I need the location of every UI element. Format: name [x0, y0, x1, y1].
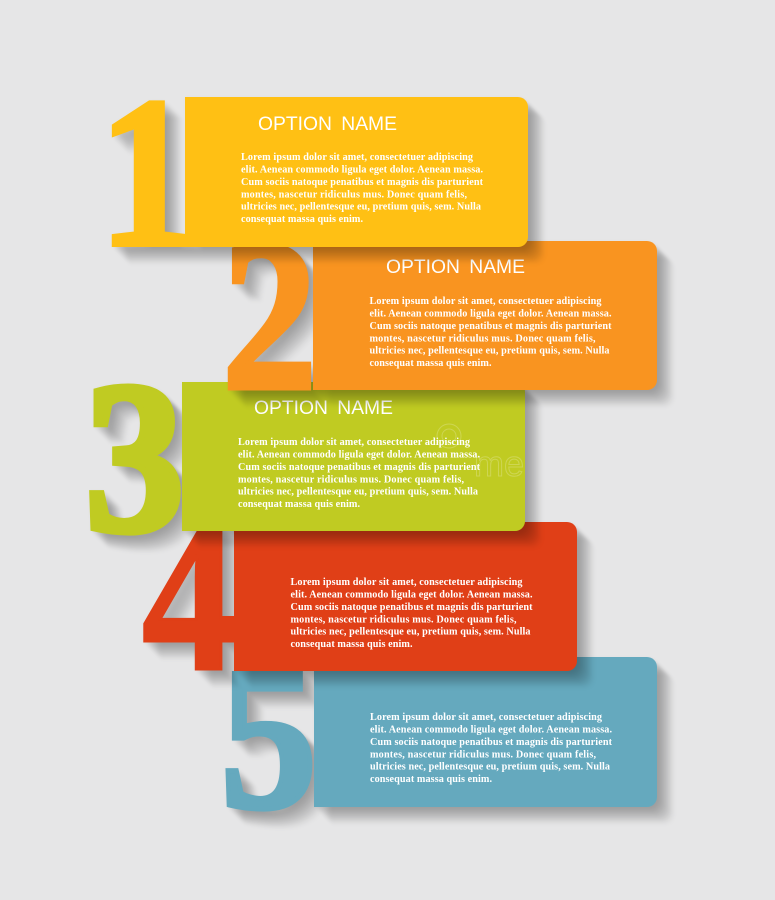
body text 4 [290, 577, 533, 650]
body text 2 [370, 296, 612, 369]
body text 3: ultricies nec, pellentesque eu, pretium quis, sem. Nulla [238, 487, 478, 498]
number 3 and green panel [85, 337, 525, 577]
body text 4: ultricies nec, pellentesque eu, pretium quis, sem. Nulla [290, 627, 530, 638]
number 5 and blue panel [225, 657, 673, 828]
faint watermark [437, 424, 524, 484]
body text 3: consequat massa quis enim. [238, 499, 360, 510]
title 2: OPTION NAME [386, 257, 525, 278]
number 4 and red panel [142, 478, 577, 717]
body text 5 [370, 712, 613, 785]
body text 4: Cum sociis natoque penatibus et magnis dis parturient [290, 602, 533, 613]
number 5 and blue panel: 5 [220, 616, 317, 854]
title 1: OPTION NAME [258, 114, 397, 135]
number 2 and orange panel [222, 197, 657, 436]
body text 5: elit. Aenean commodo ligula eget dolor. Aenean massa. [370, 724, 612, 736]
body text 3 [238, 437, 481, 510]
body text 3: elit. Aenean commodo ligula eget dolor. Aenean massa. [238, 450, 480, 460]
body text 3: Cum sociis natoque penatibus et magnis dis parturient [238, 462, 481, 473]
body text 1: ultricies nec, pellentesque eu, pretium quis, sem. Nulla [241, 202, 481, 213]
body text 4: consequat massa quis enim. [290, 639, 413, 650]
number 1 and yellow panel: 1 [98, 54, 195, 292]
body text 2: montes, nascetur ridiculus mus. Donec quam felis, [370, 333, 596, 344]
body text 1 [241, 152, 484, 225]
body text 3: Lorem ipsum dolor sit amet, consectetuer adipiscing [238, 437, 470, 448]
option 2 [222, 197, 657, 436]
body text 3: montes, nascetur ridiculus mus. Donec quam felis, [238, 474, 464, 485]
body text 5: montes, nascetur ridiculus mus. Donec quam felis, [370, 749, 596, 760]
body text 1: elit. Aenean commodo ligula eget dolor. Aenean massa. [241, 164, 483, 176]
body text 2: Cum sociis natoque penatibus et magnis dis parturient [370, 321, 612, 332]
body text 2: elit. Aenean commodo ligula eget dolor. Aenean massa. [370, 308, 612, 320]
option 5 [225, 657, 673, 828]
number 2 and orange panel: 2 [222, 197, 317, 436]
body text 1: consequat massa quis enim. [241, 214, 363, 225]
body text 2: Lorem ipsum dolor sit amet, consectetuer adipiscing [370, 296, 602, 307]
number 1 and yellow panel [98, 54, 528, 292]
body text 5: Lorem ipsum dolor sit amet, consectetuer adipiscing [370, 712, 602, 723]
option 4 [142, 478, 577, 717]
title 3: OPTION NAME [254, 398, 393, 419]
body text 2: consequat massa quis enim. [370, 358, 492, 369]
body text 4: montes, nascetur ridiculus mus. Donec quam felis, [290, 614, 517, 625]
body text 1: Cum sociis natoque penatibus et magnis dis parturient [241, 177, 484, 188]
body text 4: Lorem ipsum dolor sit amet, consectetuer adipiscing [290, 577, 522, 588]
body text 5: Cum sociis natoque penatibus et magnis dis parturient [370, 737, 613, 748]
body text 1: montes, nascetur ridiculus mus. Donec quam felis, [241, 189, 467, 200]
body text 2: ultricies nec, pellentesque eu, pretium quis, sem. Nulla [370, 346, 610, 357]
option 3 [85, 337, 525, 577]
option 1 [98, 54, 528, 292]
body text 4: elit. Aenean commodo ligula eget dolor. Aenean massa. [290, 590, 533, 600]
body text 5: ultricies nec, pellentesque eu, pretium quis, sem. Nulla [370, 762, 610, 773]
faint watermark: me [474, 443, 524, 484]
number 3 and green panel: 3 [85, 337, 184, 577]
body text 5: consequat massa quis enim. [370, 774, 492, 785]
body text 1: Lorem ipsum dolor sit amet, consectetuer adipiscing [241, 152, 473, 163]
number 4 and red panel: 4 [142, 478, 237, 717]
